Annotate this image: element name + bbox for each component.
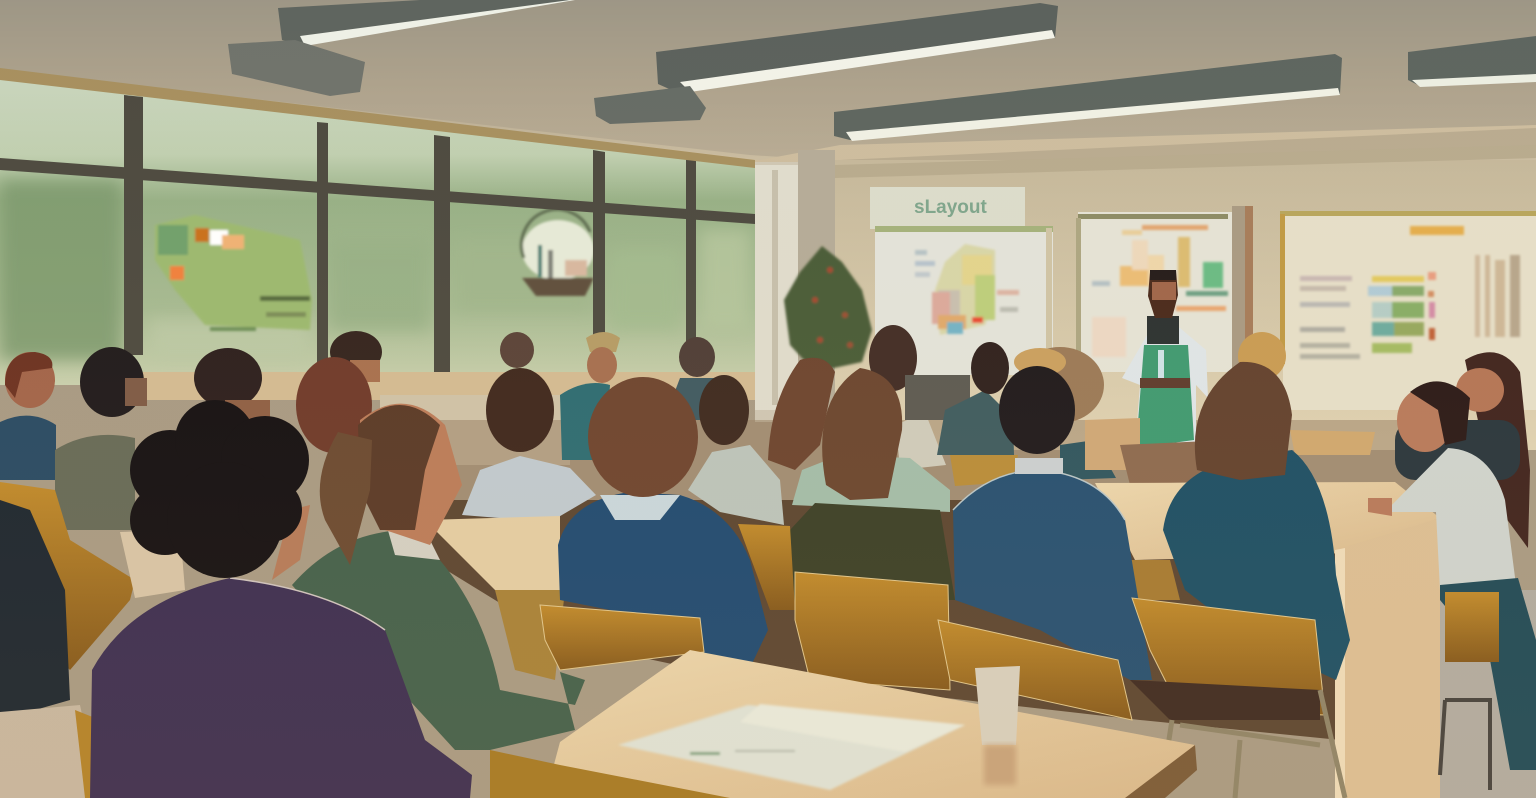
left foreground floor: [0, 705, 100, 798]
back wall: [835, 160, 1536, 450]
poster: data table: [1280, 211, 1536, 410]
floor shadow under tables and chairs: [430, 500, 1340, 740]
poster: left map: [870, 187, 1053, 375]
table leg shadows: [495, 590, 565, 680]
table: right large: [1095, 482, 1440, 798]
audience: back row: [194, 331, 1286, 460]
person: ponytail woman green sweater: [292, 404, 585, 750]
chair: left: [0, 482, 135, 670]
chair: [1132, 598, 1325, 715]
poster: bar chart: [1076, 206, 1253, 372]
person: right profile woman: [1368, 381, 1536, 770]
person: front left purple sweater: [90, 400, 472, 798]
person: teal shirt mid row: [937, 342, 1014, 455]
poster heading: sLayout: [914, 197, 988, 218]
column and curtain: [755, 150, 835, 422]
table: middle left: [425, 516, 560, 590]
person: second row brown long hair: [768, 358, 835, 470]
presenter: [1122, 270, 1208, 448]
right side floor: [1440, 590, 1536, 798]
window sill: [140, 372, 760, 400]
green map decal on window: [155, 215, 312, 331]
person: green collar and brown hair: [790, 368, 955, 605]
chair: [938, 620, 1132, 720]
person: back row far: [330, 331, 1286, 460]
chair: [795, 572, 950, 690]
person: left grey green shirt: [55, 347, 147, 530]
person: far left blue shirt: [0, 352, 56, 480]
table: left small: [120, 530, 185, 598]
person: teal woman: [1163, 362, 1350, 680]
round badge on window: [522, 210, 594, 296]
person: blue sweater centre: [558, 377, 768, 668]
person: back right woman: [1395, 352, 1530, 548]
window glass: [0, 78, 755, 385]
person: blue sweater right: [953, 366, 1152, 680]
chair: centre back: [738, 524, 795, 610]
ceiling: [0, 0, 1536, 180]
chair: right small: [1440, 592, 1499, 790]
window frames: [0, 95, 755, 372]
chair: [540, 605, 704, 670]
plant: [784, 246, 872, 372]
person: second row white shirt: [462, 368, 596, 522]
far right tables: [950, 418, 1375, 486]
person: dark figure far left: [0, 500, 70, 720]
person: seated, brown hair: [296, 357, 372, 453]
person: seated near plant: [869, 325, 970, 470]
papers: [618, 704, 965, 790]
chairs: front row: [0, 482, 1345, 798]
curly hair: [130, 400, 309, 578]
back row area floor shade: [440, 420, 1440, 500]
person: seated, dark hair: [194, 348, 270, 422]
person: second row grey shirt: [688, 375, 784, 525]
cup: [975, 666, 1020, 785]
ceiling lights: [228, 0, 1536, 141]
person: blonde seated: [1014, 347, 1116, 480]
table: front: [490, 650, 1197, 798]
window wall: [0, 68, 760, 465]
